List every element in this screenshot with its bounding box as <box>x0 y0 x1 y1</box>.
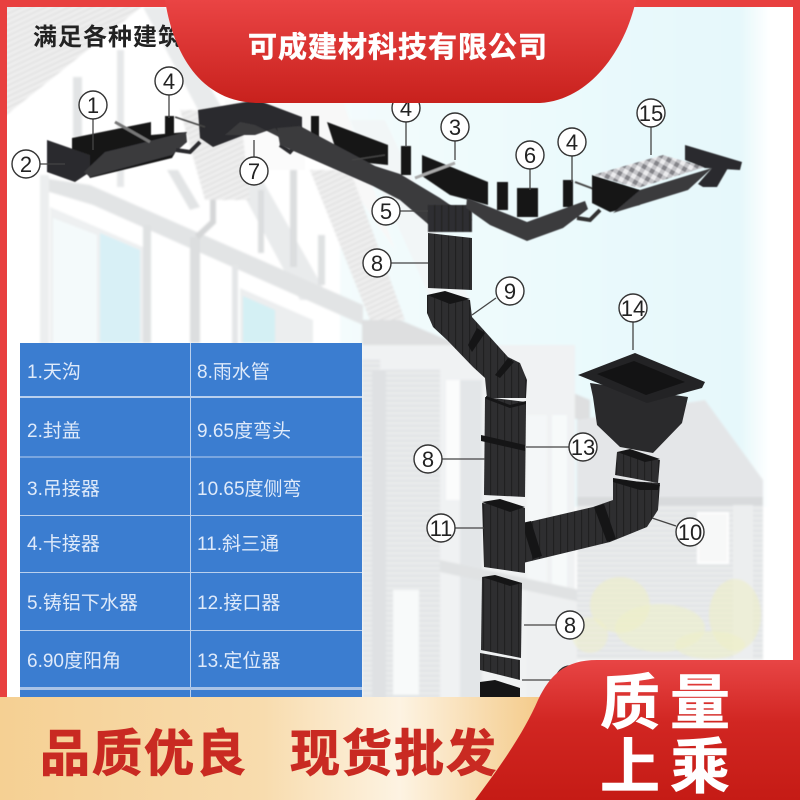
number callouts: 8 <box>371 251 383 276</box>
number callouts: 4 <box>163 69 175 94</box>
number callouts: 15 <box>639 101 663 126</box>
downspout middle: part 8 <box>481 396 526 497</box>
parts table: 9.65度弯头 <box>197 420 291 442</box>
parts table: 4.卡接器 <box>27 533 100 555</box>
number callouts: 8 <box>422 447 434 472</box>
number callouts: 13 <box>571 435 595 460</box>
number callouts: 10 <box>678 520 702 545</box>
number callouts: 8 <box>564 613 576 638</box>
title text: 满足各种建筑 <box>33 23 183 51</box>
parts table: 11.斜三通 <box>197 533 279 555</box>
gutter assembly: corner piece <box>175 100 319 152</box>
parts table: 6.90度阳角 <box>27 650 121 672</box>
bottom right red quality badge: 上乘 <box>600 734 740 800</box>
bottom right red quality badge: 质量 <box>600 670 740 737</box>
gutter assembly: centre section <box>277 122 488 224</box>
funnel hopper: part 14 <box>578 353 705 453</box>
gutter assembly: part 15 with leaf grate <box>592 145 742 213</box>
number callouts: 12 <box>558 668 582 693</box>
number callouts <box>12 67 704 694</box>
bottom right red quality badge <box>475 660 800 800</box>
number callouts: 11 <box>430 516 452 541</box>
number callouts: 3 <box>449 115 461 140</box>
leader lines <box>40 95 676 680</box>
number callouts: 4 <box>566 130 578 155</box>
parts table: 3.吊接器 <box>27 478 100 500</box>
top red company banner: 可成建材科技有限公司 <box>248 31 548 64</box>
gutter assembly: left section <box>47 116 200 182</box>
elbow and offset: part 9 <box>427 291 527 398</box>
parts table: 10.65度侧弯 <box>197 478 302 500</box>
parts table: 13.定位器 <box>197 650 280 672</box>
number callouts: 5 <box>380 199 392 224</box>
number callouts: 6 <box>524 143 536 168</box>
parts table: 5.铸铝下水器 <box>27 592 138 614</box>
parts table: 8.雨水管 <box>197 361 270 383</box>
gutter assembly: right section <box>466 180 618 241</box>
parts table: 12.接口器 <box>197 592 280 614</box>
downspout upper: part 8 <box>428 233 472 290</box>
bottom beige slogan banner <box>0 697 800 800</box>
tee fitting: part 11 <box>482 499 525 573</box>
top red company banner <box>165 0 636 103</box>
number callouts: 9 <box>504 279 516 304</box>
number callouts: 14 <box>621 296 645 321</box>
parts table <box>20 343 362 700</box>
branch pipe from funnel: part 10 <box>507 449 660 563</box>
parts table: 2.封盖 <box>27 420 81 442</box>
gutter outlet: part 5 <box>428 205 472 232</box>
bottom beige slogan banner: 现货批发 <box>290 726 498 782</box>
number callouts: 1 <box>87 93 99 118</box>
parts table: 1.天沟 <box>27 361 81 383</box>
number callouts: 4 <box>400 96 412 121</box>
number callouts: 2 <box>20 152 32 177</box>
downspout lower: part 8 and coupling <box>480 575 522 700</box>
bottom beige slogan banner: 品质优良 <box>40 726 248 782</box>
number callouts: 7 <box>248 159 260 184</box>
